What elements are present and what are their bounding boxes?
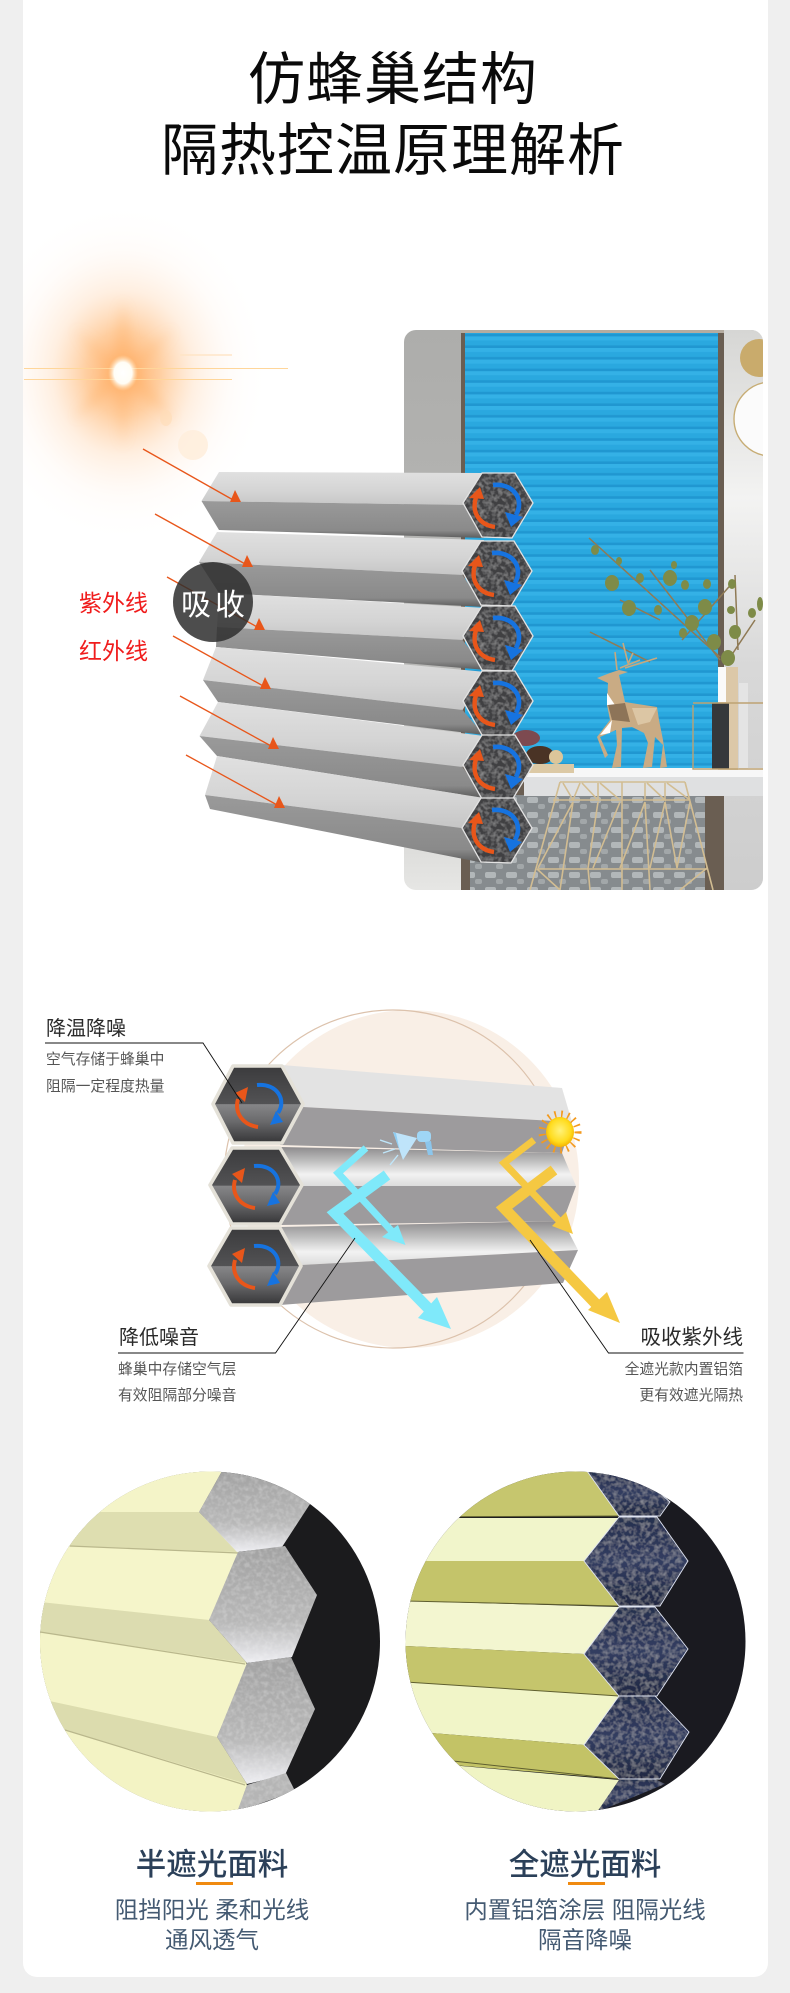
- airflow arrows: [232, 1085, 283, 1288]
- row 1 faces: [202, 472, 484, 538]
- deer figurine: [597, 643, 667, 768]
- callout: UV absorb: 吸收紫外线: [640, 1326, 743, 1349]
- sun icon: [542, 1114, 578, 1150]
- hexagon ends: [209, 1066, 303, 1305]
- blue honeycomb blind: [465, 333, 718, 770]
- title: 仿蜂巢结构: [248, 48, 538, 112]
- row 3 faces: [216, 593, 486, 670]
- title: 隔热控温原理解析: [161, 119, 625, 183]
- cell faces: [280, 1065, 578, 1305]
- vases: [693, 667, 763, 770]
- callout: noise reduction: [118, 1326, 236, 1404]
- callout: noise reduction: 降低噪音: [119, 1326, 199, 1349]
- UV arrows: [504, 1140, 620, 1323]
- caption: full blackout: 全遮光面料: [509, 1848, 661, 1882]
- panel: window photo: [404, 330, 790, 890]
- speaker icon: [380, 1131, 433, 1165]
- caption: semi-blackout: [115, 1848, 309, 1953]
- lower window view: [470, 795, 705, 890]
- callout: noise reduction: 有效阻隔部分噪音: [118, 1387, 236, 1404]
- label: infrared: 红外线: [79, 638, 148, 664]
- cell airflow icons: [462, 473, 533, 863]
- badge: absorb: [173, 562, 253, 642]
- callout: cooling and noise: 降温降噪: [46, 1017, 126, 1040]
- succulent tray: [512, 730, 574, 773]
- row 2 faces: [199, 532, 484, 607]
- sun-ray arrows: [143, 449, 285, 808]
- marble table top: [524, 768, 763, 796]
- backdrop circle: [224, 1010, 579, 1348]
- gold stool: [530, 782, 713, 890]
- fabric circle: full blackout: [405, 1471, 746, 1813]
- cross-section diagram: [45, 1010, 744, 1353]
- caption: semi-blackout: 半遮光面料: [136, 1848, 288, 1882]
- callout: UV absorb: 全遮光款内置铝箔: [625, 1360, 743, 1378]
- caption: full blackout: 隔音降噪: [538, 1927, 632, 1953]
- window frame: [461, 330, 724, 890]
- caption: full blackout: 内置铝箔涂层 阻隔光线: [464, 1897, 706, 1923]
- sun glare: [23, 255, 288, 490]
- row 5 faces: [200, 702, 484, 798]
- callout: cooling and noise: 阻隔一定程度热量: [46, 1078, 165, 1095]
- callout: UV absorb: [625, 1326, 743, 1404]
- row 6 faces: [205, 756, 484, 863]
- fabric circle: semi-blackout: [40, 1471, 380, 1813]
- callout: noise reduction: 蜂巢中存储空气层: [118, 1361, 236, 1378]
- honeycomb cutaway: six cells: [199, 472, 533, 863]
- wall mirror: [733, 339, 763, 456]
- branch plant: [589, 538, 763, 666]
- label: UV: 紫外线: [79, 590, 148, 616]
- callout leader lines: [45, 1043, 744, 1353]
- callout: cooling and noise: [46, 1017, 165, 1095]
- badge: absorb: 吸收: [181, 589, 245, 622]
- caption: semi-blackout: 通风透气: [165, 1927, 259, 1953]
- row 4 faces: [203, 647, 486, 735]
- title: [161, 48, 625, 183]
- callout: UV absorb: 更有效遮光隔热: [639, 1387, 743, 1404]
- callout: cooling and noise: 空气存储于蜂巢中: [46, 1051, 164, 1068]
- caption: semi-blackout: 阻挡阳光 柔和光线: [115, 1897, 309, 1923]
- caption: full blackout: [464, 1848, 706, 1953]
- sound arrows: [335, 1148, 451, 1329]
